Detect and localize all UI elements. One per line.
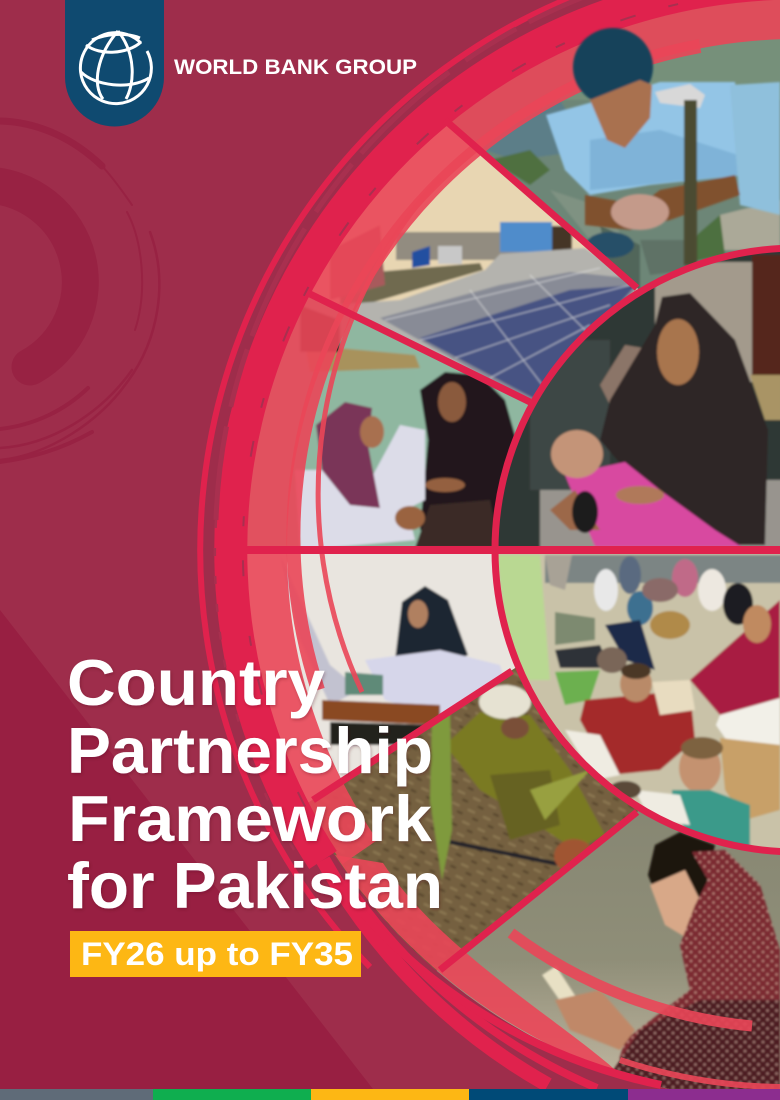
title: Partnership: [67, 714, 433, 787]
title: Country: [67, 646, 325, 719]
segment dividers: [243, 120, 780, 970]
photo: boy in foreground: [546, 28, 780, 265]
panel: logo tab: [65, 0, 417, 126]
title: [67, 646, 443, 922]
panel: brush ring overlay: [200, 0, 780, 1088]
bottom colour bar: [0, 1089, 780, 1100]
date badge: FY26 up to FY35: [81, 936, 353, 972]
photo: boy at water tap background: [452, 0, 780, 289]
photo: schoolchildren on floor: [490, 550, 780, 860]
pale translucent brush bands: [266, 18, 780, 1087]
brush ring strokes: [200, 0, 780, 1088]
photo: rooftop solar panels: [312, 126, 638, 400]
date badge: [70, 931, 361, 977]
photo: mother with baby: [490, 240, 780, 860]
dark brush flecks: [214, 0, 678, 850]
title: for Pakistan: [67, 849, 443, 922]
decorative brush swirl: [0, 121, 159, 462]
panel: photo collage: [200, 0, 780, 1090]
icon: globe: [80, 31, 151, 104]
photo: woman using phone: [436, 811, 780, 1089]
logo wordmark: WORLD BANK GROUP: [174, 56, 417, 79]
photo: woman sewing: [248, 554, 516, 802]
photo: farmer in maize field: [334, 668, 638, 970]
title: Framework: [68, 782, 433, 855]
photo: doctor and patient: [248, 298, 530, 546]
